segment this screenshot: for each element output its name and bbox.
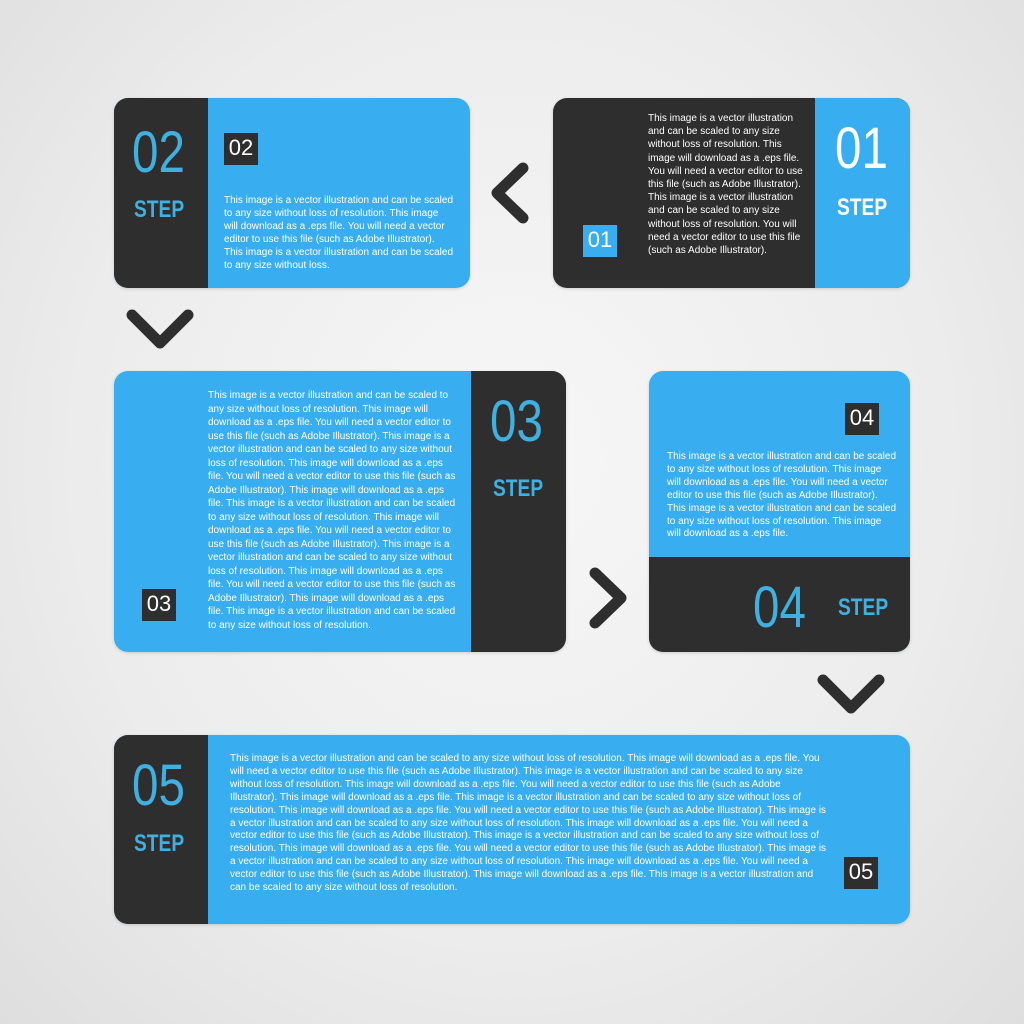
number 02: 02 (132, 120, 185, 185)
blue side 01 (815, 98, 910, 288)
arrow: down chevron 2 (818, 674, 884, 714)
text 05: This image is a vector illustration and can be scaled to any size without loss of resolution. This image will download as a .eps file. You will need a vector editor to use this file (such as Adobe Illustrator). This image is a vector illustration and can be scaled to any size without loss of resolution. This image will download as a .eps file. You will need a vector editor to use this file (such as Adobe Illustrator). This image will download as a .eps file. This image is a vector illustration and can be scaled to any size without loss of resolution. This image will download as a .eps file. You will need a vector editor to use this file (such as Adobe Illustrator). This image is a vector illustration and can be scaled to any size without loss of resolution. This image will download as a .eps file. You will need a vector editor to use this file (such as Adobe Illustrator). This image is a vector illustration and can be scaled to any size without loss of resolution. This image will download as a .eps file. You will need a vector editor to use this file (such as Adobe Illustrator). This image is a vector illustration and can be scaled to any size without loss of resolution. This image will download as a .eps file. You will need a vector editor to use this file (such as Adobe Illustrator). This image will download as a .eps file. This image is a vector illustration and can be scaled to any size without loss of resolution. (230, 753, 826, 893)
text 02: This image is a vector illustration and can be scaled to any size without loss of resolution. This image will download as a .eps file. You will need a vector editor to use this file (such as Adobe Illustrator). This image is a vector illustration and can be scaled to any size without loss. (224, 195, 453, 271)
panel: step 03 (114, 371, 566, 652)
panel: step 05 (114, 735, 910, 924)
tag 03 (142, 589, 176, 621)
tag 01 (583, 225, 617, 257)
dark side 02 (114, 98, 208, 288)
tag 03: 03 (147, 591, 171, 616)
dark side 03 (471, 371, 566, 652)
number 01: 01 (835, 116, 888, 181)
panel: step 01 (553, 98, 910, 288)
text 01: This image is a vector illustration and can be scaled to any size without loss of resolution. This image will download as a .eps file. You will need a vector editor to use this file (such as Adobe Illustrator). This image is a vector illustration and can be scaled to any size without loss of resolution. You will need a vector editor to use this file (such as Adobe Illustrator). (648, 113, 803, 256)
tag 02 (224, 133, 258, 165)
arrow: down chevron 1 (126, 310, 194, 348)
panel: step 04 (649, 371, 910, 652)
number 03: 03 (490, 389, 543, 454)
text 03: This image is a vector illustration and can be scaled to any size without loss of resolution. This image will download as a .eps file. You will need a vector editor to use this file (such as Adobe Illustrator). This image is a vector illustration and can be scaled to any size without loss of resolution. This image will download as a .eps file. You will need a vector editor to use this file (such as Adobe Illustrator). This image will download as a .eps file. This image is a vector illustration and can be scaled to any size without loss of resolution. This image will download as a .eps file. You will need a vector editor to use this file (such as Adobe Illustrator). This image is a vector illustration and can be scaled to any size without loss of resolution. This image will download as a .eps file. You will need a vector editor to use this file (such as Adobe Illustrator). This image will download as a .eps file. This image is a vector illustration and can be scaled to any size without loss of resolution. (208, 390, 455, 630)
tag 05 (844, 857, 878, 889)
dark side 05 (114, 735, 208, 924)
tag 05: 05 (849, 859, 873, 884)
arrow: left chevron (492, 162, 528, 224)
tag 04: 04 (850, 405, 874, 430)
tag 02: 02 (229, 135, 253, 160)
tag 04 (845, 403, 879, 435)
label step: STEP (838, 594, 888, 621)
number 05: 05 (132, 753, 185, 818)
tag 01: 01 (588, 227, 612, 252)
label step: STEP (493, 475, 543, 502)
label step: STEP (134, 830, 184, 857)
dark bottom 04 (649, 557, 910, 652)
number 04: 04 (753, 575, 806, 640)
arrow: right chevron (590, 568, 626, 628)
panel: step 02 (114, 98, 470, 288)
label step: STEP (134, 196, 184, 223)
label step: STEP (837, 194, 887, 221)
text 04: This image is a vector illustration and can be scaled to any size without loss of resolution. This image will download as a .eps file. You will need a vector editor to use this file (such as Adobe Illustrator). This image is a vector illustration and can be scaled to any size without loss of resolution. This image will download as a .eps file. (667, 451, 896, 539)
